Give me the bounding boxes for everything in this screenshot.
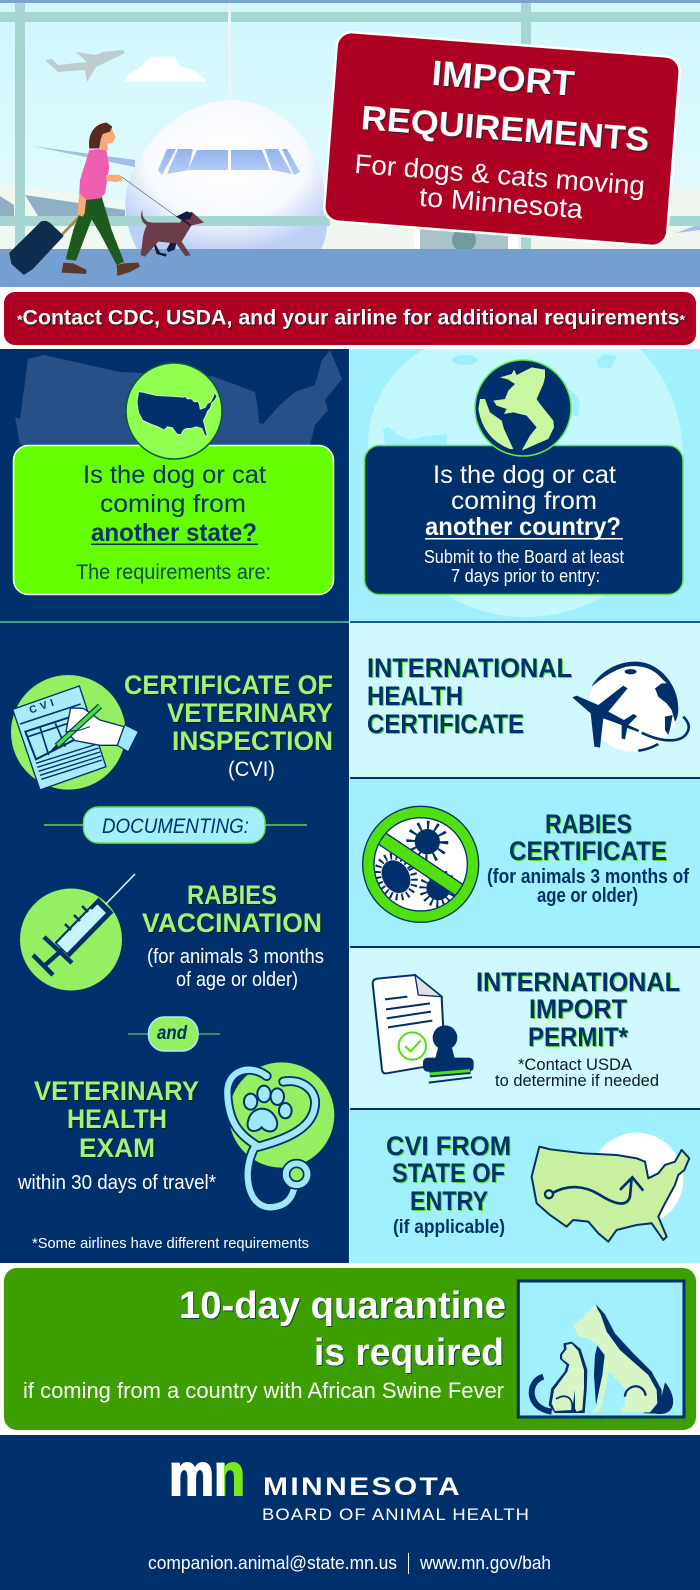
contact notice banner: *Contact CDC, USDA, and your airline for additional requirements * [17,306,686,330]
section: CVI from state of entry [350,1108,700,1263]
section: rabies certificate: age or older) [537,885,638,907]
icon: globe badge [475,360,571,456]
section: international import permit: IMPORT [529,994,627,1024]
heading: veterinary health exam: within 30 days of travel* [17,1172,216,1194]
icon: cloud [124,56,207,82]
panel: quarantine callout [4,1268,696,1430]
question box: another state: Is the dog or cat [83,461,266,489]
heading: certificate of veterinary inspection: (CVI) [228,758,275,781]
subtitle [351,149,646,229]
icon: CVI document and hand: CVI [28,697,59,716]
section: CVI from state of entry: ENTRY [410,1186,488,1216]
section: international import permit: INTERNATIONAL [476,967,680,997]
section: international import permit: PERMIT* [528,1022,628,1052]
quarantine note: if coming from a country with African Swine Fever [23,1378,504,1403]
icon: globe and plane [572,662,689,752]
panel: another state column [0,349,349,1263]
question box: another state [14,446,334,594]
section: rabies certificate: RABIES [545,809,632,839]
icon: airplane nose [125,100,327,249]
heading: rabies vaccination: of age or older) [176,969,298,991]
documenting pill [44,807,307,843]
heading: certificate of veterinary inspection: VETERINARY [167,698,333,728]
background globe [368,349,683,617]
icon: document with stamp [373,975,474,1083]
icon: woman walking with suitcase [11,123,177,276]
section: international health certificate [350,621,700,778]
icon: syringe [20,874,135,990]
subtitle: to Minnesota [418,182,585,224]
contact details [148,1553,551,1574]
question box: another country: another country? [425,513,621,541]
contact notice banner [4,292,696,345]
heading: veterinary health exam: HEALTH [67,1104,167,1134]
organisation name: BOARD OF ANIMAL HEALTH [262,1505,530,1524]
section: international import permit: to determine if needed [495,1071,659,1090]
heading: certificate of veterinary inspection: CERTIFICATE OF [124,670,333,700]
icon: dog on leash [141,209,204,257]
heading: certificate of veterinary inspection: INSPECTION [172,726,333,756]
logo: Minnesota mn: mn [169,1442,245,1508]
question box: another country [364,446,683,594]
panel: another country column [350,349,700,1263]
contact details: www.mn.gov/bah [419,1553,551,1573]
distant ground and wings [0,146,700,252]
footer [0,1435,700,1590]
and pill: and [157,1023,187,1044]
quarantine heading [179,1285,506,1374]
footnote: airlines: *Some airlines have different requirements [32,1235,309,1252]
icon: US map with route [532,1133,689,1242]
heading: veterinary health exam [17,1076,216,1194]
heading: rabies vaccination: (for animals 3 months [147,946,324,968]
section: international health certificate: INTERNATIONAL [367,653,572,683]
icon: cats silhouette [518,1281,684,1417]
section: international import permit [350,946,700,1109]
quarantine heading: 10-day quarantine [179,1285,506,1327]
organisation name: MINNESOTA [263,1473,462,1501]
window frame [0,3,700,249]
quarantine heading: is required [314,1332,504,1374]
icon: stethoscope with paw [227,1062,334,1207]
title sign [323,31,681,247]
heading: rabies vaccination [142,880,324,991]
documenting pill: DOCUMENTING: [102,815,249,838]
organisation name [262,1473,530,1524]
heading: import requirements [360,49,655,159]
section: international import permit: *Contact USDA [518,1055,633,1074]
section: CVI from state of entry: STATE OF [392,1158,505,1188]
question box: another country: Submit to the Board at least [424,547,624,567]
icon: distant plane silhouette [45,50,125,82]
icon: no virus sign [368,812,473,917]
question box: another state: another state? [91,519,257,547]
question box: another country: coming from [451,487,597,515]
floor [0,249,700,287]
contact details: companion.animal@state.mn.us [148,1553,397,1573]
heading: rabies vaccination: RABIES [187,880,277,910]
section: international health certificate: CERTIFICATE [367,709,524,739]
heading: veterinary health exam: EXAM [79,1133,155,1163]
hero airport scene [0,0,700,287]
icon: US map badge [126,363,222,459]
subtitle: For dogs & cats moving [354,149,646,201]
section: rabies certificate: CERTIFICATE [509,836,667,866]
and pill [128,1017,220,1051]
question box: another country: 7 days prior to entry: [451,566,600,586]
heading: import requirements: REQUIREMENTS [360,99,651,159]
background US map [15,350,342,445]
section: CVI from state of entry: CVI FROM [386,1131,511,1161]
heading: rabies vaccination: VACCINATION [142,908,322,938]
heading: certificate of veterinary inspection [124,670,333,781]
heading: import requirements: IMPORT [430,54,576,104]
question box: another state: The requirements are: [76,561,271,584]
question box: another state: coming from [100,490,246,518]
section: international health certificate: HEALTH [367,681,463,711]
section: CVI from state of entry: (if applicable) [393,1217,505,1238]
question box: another country: Is the dog or cat [433,461,616,489]
icon: CVI document and hand [11,675,138,790]
section: rabies certificate [350,777,700,947]
heading: veterinary health exam: VETERINARY [34,1076,199,1106]
